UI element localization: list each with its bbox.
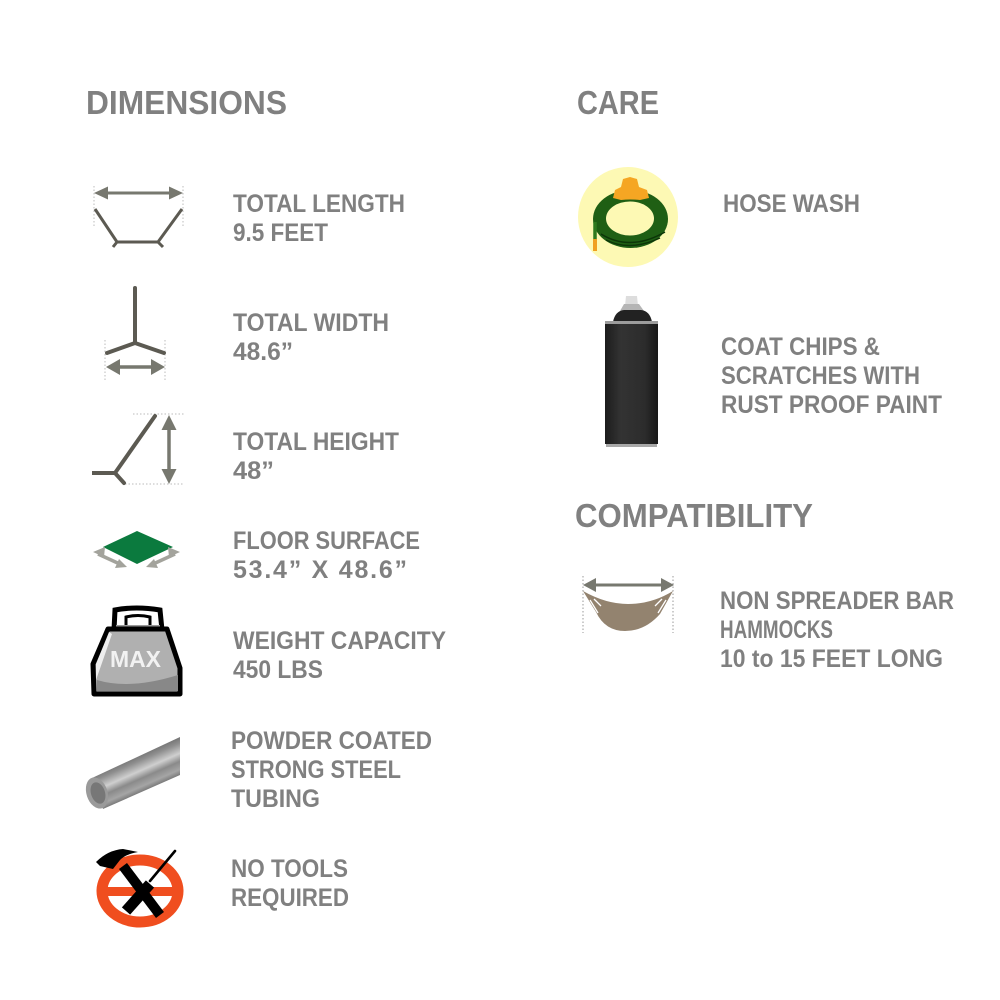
icon: weight capacity: MAX bbox=[110, 646, 162, 672]
text: spray paint: COAT CHIPS & bbox=[721, 333, 880, 361]
icon: steel tube bbox=[82, 737, 180, 811]
icon: hose bbox=[578, 167, 678, 267]
text: total length: TOTAL LENGTH bbox=[233, 190, 405, 218]
text: weight capacity bbox=[233, 627, 446, 684]
text: spray paint: RUST PROOF PAINT bbox=[721, 391, 942, 419]
icon: total width bbox=[105, 288, 165, 382]
text: hammock: 10 to 15 FEET LONG bbox=[720, 645, 943, 673]
icon: floor surface bbox=[93, 531, 180, 568]
icon: hammock bbox=[583, 576, 674, 633]
text: total length bbox=[233, 190, 405, 247]
icon: no tools bbox=[96, 849, 180, 922]
text: floor surface: FLOOR SURFACE bbox=[233, 527, 420, 555]
text: total width bbox=[233, 309, 389, 366]
text: steel tube bbox=[231, 727, 432, 813]
text: total height: 48” bbox=[233, 457, 274, 485]
heading: compatibility: COMPATIBILITY bbox=[575, 497, 813, 534]
text: total width: TOTAL WIDTH bbox=[233, 309, 389, 337]
text: total height: TOTAL HEIGHT bbox=[233, 428, 399, 456]
icon: total length bbox=[94, 186, 183, 247]
text: spray paint: SCRATCHES WITH bbox=[721, 362, 920, 390]
text: hammock: NON SPREADER BAR bbox=[720, 587, 954, 615]
heading: dimensions: DIMENSIONS bbox=[86, 84, 287, 121]
text: weight capacity: WEIGHT CAPACITY bbox=[233, 627, 446, 655]
text: hammock: HAMMOCKS bbox=[720, 616, 833, 644]
text: spray paint bbox=[721, 333, 942, 419]
text: floor surface bbox=[233, 527, 420, 584]
text: steel tube: POWDER COATED bbox=[231, 727, 432, 755]
text: no tools: REQUIRED bbox=[231, 884, 349, 912]
text: hammock bbox=[720, 587, 954, 673]
text: steel tube: STRONG STEEL bbox=[231, 756, 401, 784]
heading: care: CARE bbox=[577, 84, 659, 121]
text: hose wash: HOSE WASH bbox=[723, 190, 860, 218]
text: floor surface: 53.4” X 48.6” bbox=[233, 556, 407, 584]
text: weight capacity: 450 LBS bbox=[233, 656, 323, 684]
text: total height bbox=[233, 428, 399, 485]
icon: total height bbox=[92, 414, 184, 484]
text: no tools bbox=[231, 855, 349, 912]
text: no tools: NO TOOLS bbox=[231, 855, 348, 883]
text: total length: 9.5 FEET bbox=[233, 219, 328, 247]
text: steel tube: TUBING bbox=[231, 785, 320, 813]
text: total width: 48.6” bbox=[233, 338, 293, 366]
icon: weight capacity bbox=[93, 608, 180, 694]
icon: spray can bbox=[605, 296, 658, 447]
